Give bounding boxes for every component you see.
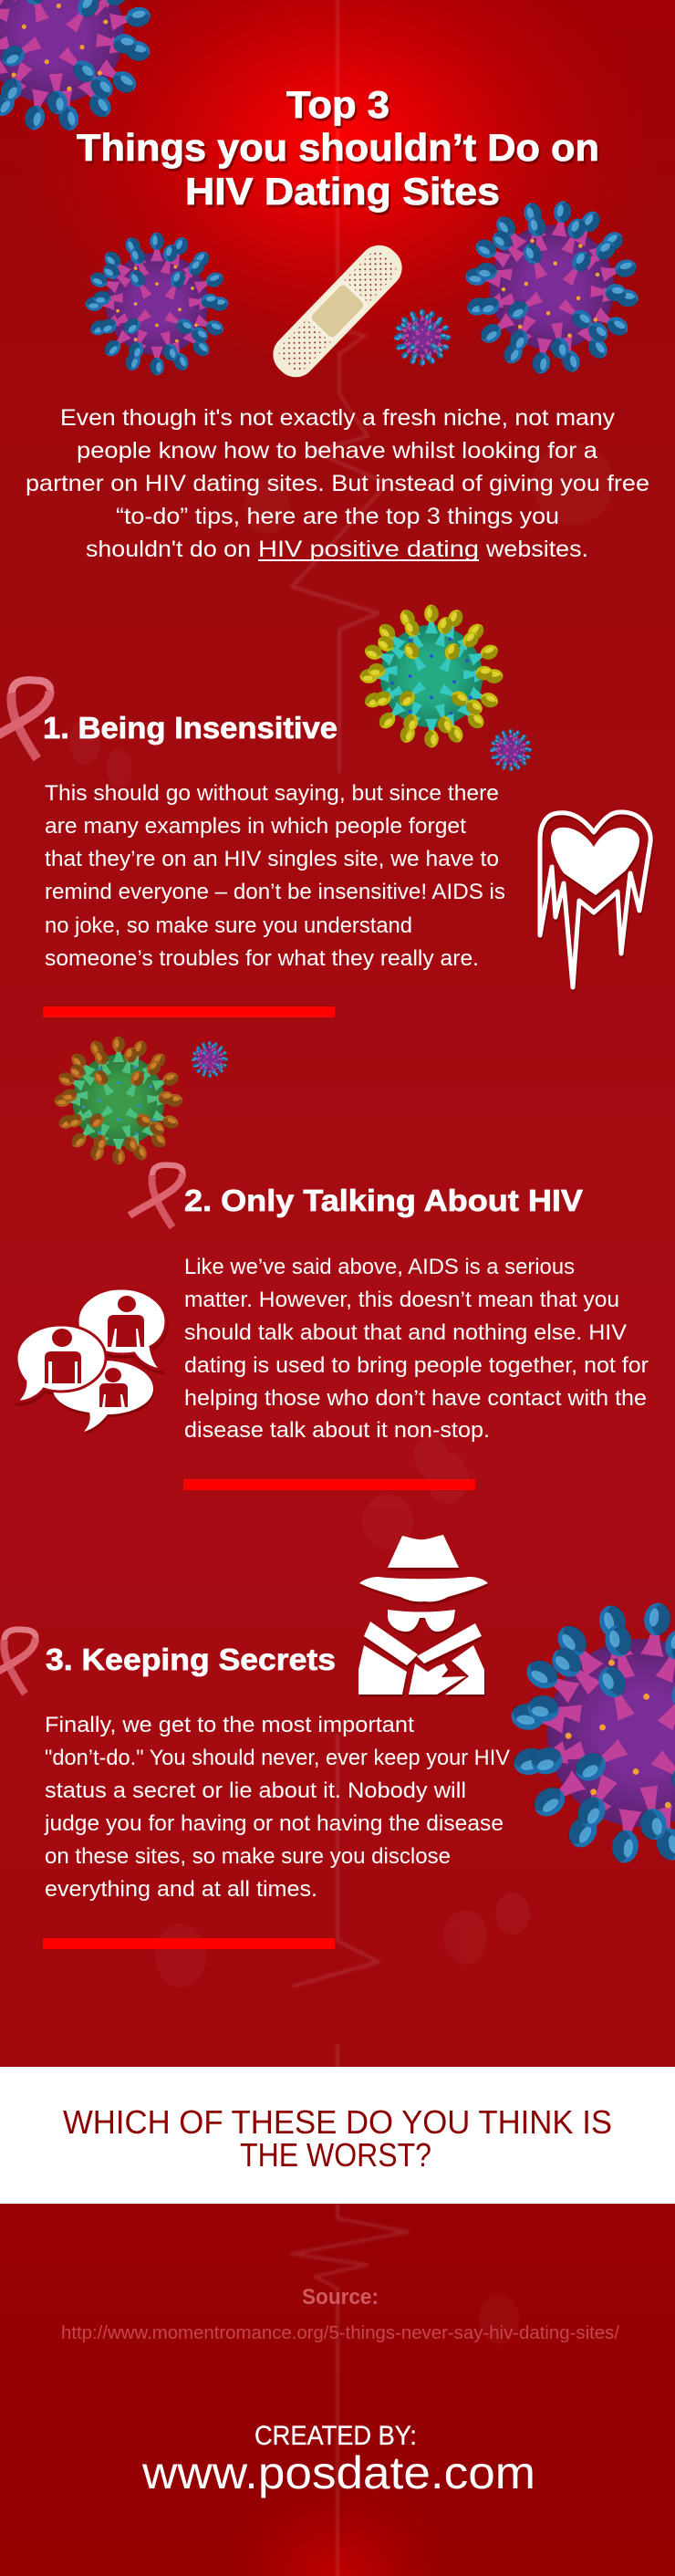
title: Top 3 [286, 83, 389, 126]
section 2 body text: should talk about that and nothing else. HIV [184, 1320, 627, 1345]
intro text: partner on HIV dating sites. But instead of giving you free [26, 471, 649, 496]
section 1 body text: no joke, so make sure you understand [45, 913, 412, 938]
virus: tiny purple section 1 [490, 729, 532, 771]
section 1 body text: This should go without saying, but since there [45, 781, 499, 806]
section 2 body text: helping those who don’t have contact with the [184, 1386, 647, 1411]
section 3 body text [44, 1713, 510, 1902]
title: Things you shouldn’t Do on [77, 126, 599, 169]
panel: question band: THE WORST? [240, 2136, 431, 2174]
virus: right edge purple [493, 1585, 675, 1881]
icon: ribbon section 3 [0, 1630, 36, 1694]
icon: bandage [265, 237, 410, 385]
title [77, 83, 599, 213]
credits [141, 2421, 535, 2498]
section 3 body text: on these sites, so make sure you disclose [45, 1844, 451, 1869]
source [61, 2285, 619, 2343]
section 1 body text: are many examples in which people forget [45, 814, 466, 839]
intro text: websites. [485, 537, 588, 562]
virus: tiny purple section 2 [192, 1041, 228, 1078]
credits: CREATED BY: [254, 2421, 417, 2451]
section 2 body text: disease talk about it non-stop. [184, 1418, 490, 1443]
section 1 body text: that they’re on an HIV singles site, we have to [45, 847, 499, 871]
icon: ribbon section 2 [130, 1165, 182, 1227]
section 3 body text: Finally, we get to the most important [45, 1713, 414, 1737]
icon: ribbon section 1 [0, 680, 50, 758]
divider bar 1 [43, 1006, 335, 1017]
virus: left purple [86, 233, 228, 375]
virus: top-left purple [0, 0, 171, 151]
section 2 body text: Like we’ve said above, AIDS is a serious [184, 1255, 575, 1279]
divider bar 2 [183, 1479, 475, 1490]
intro text: people know how to behave whilst looking for a [77, 438, 597, 464]
intro text [26, 405, 649, 562]
source: Source: [302, 2285, 379, 2310]
virus: green and brown [55, 1037, 182, 1164]
virus: right purple large [453, 189, 650, 386]
heading: only talking about HIV: 2. Only Talking About HIV [184, 1184, 583, 1217]
divider bar 3 [43, 1938, 335, 1949]
section 3 body text: status a secret or lie about it. Nobody will [45, 1778, 466, 1803]
virus: small blurred purple [394, 309, 451, 366]
virus: teal and yellow [360, 605, 503, 747]
section 2 body text [184, 1255, 649, 1443]
panel: question band: WHICH OF THESE DO YOU THINK IS [63, 2103, 612, 2141]
icon: detective [358, 1535, 488, 1695]
heading: being insensitive: 1. Being Insensitive [43, 711, 338, 745]
section 3 body text: "don’t-do." You should never, ever keep your HIV [45, 1746, 510, 1770]
section 2 body text: matter. However, this doesn’t mean that you [184, 1288, 619, 1312]
intro text: “to-do” tips, here are the top 3 things you [116, 504, 559, 529]
intro text: shouldn't do on [86, 537, 251, 562]
heading: keeping secrets: 3. Keeping Secrets [46, 1643, 336, 1676]
section 1 body text: remind everyone – don’t be insensitive! AIDS is [45, 880, 505, 904]
section 1 body text: someone’s troubles for what they really are. [45, 946, 479, 971]
section 3 body text: judge you for having or not having the disease [44, 1811, 504, 1836]
section 2 body text: dating is used to bring people together, not for [184, 1353, 649, 1378]
title: HIV Dating Sites [185, 170, 500, 213]
intro text: Even though it's not exactly a fresh niche, not many [60, 405, 616, 431]
intro text: HIV positive dating [258, 537, 479, 562]
icon: melting heart [540, 812, 650, 987]
panel: question band [0, 2067, 675, 2204]
credits: www.posdate.com [141, 2447, 535, 2498]
source: http://www.momentromance.org/5-things-never-say-hiv-dating-sites/ [61, 2323, 619, 2343]
section 3 body text: everything and at all times. [45, 1877, 317, 1902]
section 1 body text [45, 781, 505, 971]
icon: chat bubbles with people [16, 1288, 166, 1432]
